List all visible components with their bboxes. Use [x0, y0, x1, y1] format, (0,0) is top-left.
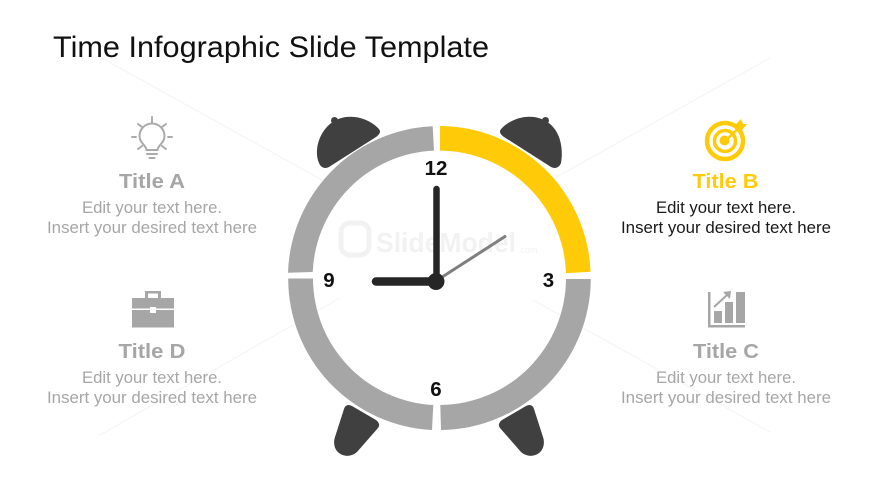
- numeral 12: 12: [425, 157, 447, 180]
- ring segment: 3 to 6: [440, 279, 591, 430]
- hour hand: [376, 277, 436, 286]
- icon: briefcase: [132, 291, 174, 328]
- left bell: [317, 117, 380, 168]
- ring segment: 9 to 12: [288, 126, 434, 273]
- icon: light bulb: [132, 117, 172, 158]
- title: Time Infographic Slide Template: [53, 31, 489, 64]
- body text: Edit your text here.: [656, 199, 796, 217]
- body text: Edit your text here.: [82, 369, 222, 387]
- body text: Insert your desired text here: [47, 389, 257, 407]
- icon: target: [707, 119, 747, 159]
- icon: growth chart: [708, 291, 745, 328]
- watermark: [341, 223, 538, 258]
- clock: [288, 117, 591, 456]
- left foot: [334, 405, 379, 456]
- body text: Edit your text here.: [656, 369, 796, 387]
- body text: Insert your desired text here: [621, 389, 831, 407]
- body text: Insert your desired text here: [47, 219, 257, 237]
- second hand: [436, 236, 505, 281]
- block: Title C: [621, 291, 831, 407]
- heading: Title A: [119, 171, 185, 193]
- numeral 6: 6: [430, 378, 442, 401]
- heading: Title D: [118, 341, 186, 363]
- numeral 9: 9: [323, 269, 335, 292]
- block: Title A: [47, 117, 257, 237]
- heading: Title B: [692, 171, 758, 193]
- ring segment: 12 to 3 (highlighted): [440, 126, 590, 273]
- body text: [47, 199, 257, 237]
- right bell: [500, 117, 562, 168]
- body text: [621, 369, 831, 407]
- heading: Title C: [693, 341, 759, 363]
- numeral 3: 3: [543, 269, 554, 292]
- minute hand: [433, 189, 440, 281]
- body text: Edit your text here.: [82, 199, 222, 217]
- ring segment: 6 to 9: [288, 278, 433, 430]
- block: Title D: [47, 291, 257, 407]
- watermark: .com: [518, 245, 538, 255]
- body text: Insert your desired text here: [621, 219, 831, 237]
- block: Title B: [621, 119, 831, 237]
- body text: [621, 199, 831, 237]
- right foot: [499, 405, 544, 456]
- watermark: SlideModel: [376, 227, 516, 258]
- body text: [47, 369, 257, 407]
- hub: [428, 273, 444, 290]
